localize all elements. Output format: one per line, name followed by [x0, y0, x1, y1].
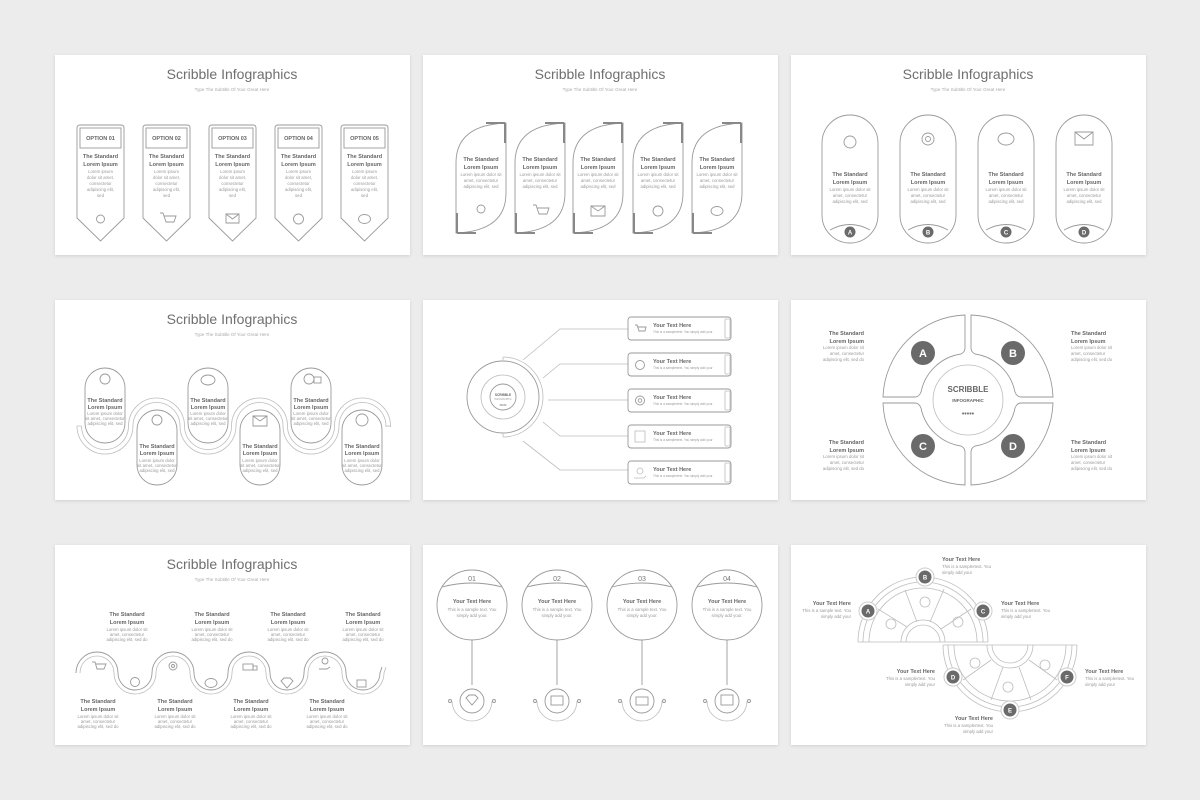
top semicircle [858, 568, 992, 642]
labels: This is a samplertext. You [942, 564, 992, 569]
top texts: amet, consectetur [110, 632, 145, 637]
side texts: amet, consectetur [830, 351, 865, 356]
bottom texts: The Standard [80, 699, 116, 705]
top texts: amet, consectetur [271, 632, 306, 637]
pills: Lorem Ipsum [911, 180, 945, 186]
top texts: The Standard [194, 612, 230, 618]
hub circle: INFOGRAPHIC [494, 398, 512, 401]
title: Scribble Infographics [167, 556, 297, 572]
labels: This is a samplertext. You [944, 723, 994, 728]
text boxes: Your Text Here [653, 323, 691, 329]
bottom texts: Lorem Ipsum [310, 707, 344, 713]
side texts: adipiscing elit, sed do [823, 466, 865, 471]
pills: The Standard [87, 398, 123, 404]
pills: The Standard [1066, 172, 1102, 178]
leaf cards [456, 123, 742, 233]
cards: sed [361, 193, 369, 198]
pills: D [1082, 230, 1087, 236]
cards: adipiscing elit, [153, 187, 180, 192]
cards: consectetur [155, 181, 178, 186]
bottom texts: Lorem ipsum dolor sit [306, 714, 348, 719]
circles: simply add your. [626, 613, 658, 618]
pills: The Standard [344, 444, 380, 450]
top texts: amet, consectetur [346, 632, 381, 637]
bottom texts: Lorem ipsum dolor sit [154, 714, 196, 719]
text boxes: This is a samplertext. You simply add your [653, 474, 713, 478]
pills: adipiscing elit, sed [832, 199, 868, 204]
wave line [76, 652, 386, 694]
cards: dolor sit amet, [351, 175, 378, 180]
subtitle: Type The Subtitle Of Your Great Here [195, 577, 270, 582]
cards: sed [229, 193, 237, 198]
pills: Lorem Ipsum [243, 451, 277, 457]
top texts: Lorem Ipsum [195, 620, 229, 626]
pills: The Standard [242, 444, 278, 450]
circles: Your Text Here [538, 599, 576, 605]
subtitle: Type The Subtitle Of Your Great Here [195, 332, 270, 337]
cards: consectetur [89, 181, 112, 186]
title: Scribble Infographics [535, 66, 665, 82]
cards [77, 125, 388, 241]
quadrant diagram: A [919, 348, 927, 360]
side texts: Lorem Ipsum [1071, 339, 1106, 345]
cards: Lorem Ipsum [83, 162, 118, 168]
top texts: Lorem ipsum dolor sit [191, 627, 233, 632]
pills: sit amet, consectetur [342, 463, 382, 468]
leaf cards: Lorem ipsum dolor sit [519, 172, 561, 177]
pills: Lorem ipsum dolor sit [985, 187, 1027, 192]
leaf cards: adipiscing elit, sed [699, 184, 735, 189]
side texts: Lorem ipsum dolor sit [1071, 454, 1113, 459]
cards: adipiscing elit, [285, 187, 312, 192]
pills: adipiscing elit, sed [344, 468, 380, 473]
labels: Your Text Here [955, 716, 993, 722]
labels: Your Text Here [942, 557, 980, 563]
cards: OPTION 01 [86, 136, 115, 142]
slide 5: hub with arrows [423, 300, 778, 500]
cards: OPTION 03 [218, 136, 247, 142]
labels: simply add your [942, 570, 973, 575]
cards: consectetur [221, 181, 244, 186]
title: Scribble Infographics [167, 66, 297, 82]
text boxes: Your Text Here [653, 431, 691, 437]
pills: C [1004, 230, 1009, 236]
slide 3: pill cards [791, 55, 1146, 255]
top texts: amet, consectetur [195, 632, 230, 637]
circles: simply add your. [541, 613, 573, 618]
pills: The Standard [190, 398, 226, 404]
cards: sed [295, 193, 303, 198]
circles: 03 [638, 576, 646, 583]
pills: Lorem Ipsum [345, 451, 379, 457]
top texts: adipiscing elit, sed do [267, 637, 309, 642]
circles: This is a sample text. You [533, 607, 582, 612]
pills: sit amet, consectetur [291, 416, 331, 421]
pills: Lorem ipsum dolor [139, 458, 175, 463]
pills: adipiscing elit, sed [139, 468, 175, 473]
circles: simply add your. [711, 613, 743, 618]
pills: The Standard [139, 444, 175, 450]
labels: Your Text Here [1085, 669, 1123, 675]
side texts [823, 331, 1113, 471]
top semicircle: C [981, 610, 986, 616]
bottom texts: amet, consectetur [81, 719, 116, 724]
leaf cards: The Standard [640, 157, 676, 163]
quadrant diagram [883, 315, 1053, 485]
bottom texts: The Standard [233, 699, 269, 705]
cards: Lorem ipsum [220, 169, 245, 174]
leaf cards: Lorem Ipsum [523, 165, 557, 171]
cards: Lorem ipsum [352, 169, 377, 174]
leaf cards: Lorem ipsum dolor sit [577, 172, 619, 177]
cards: adipiscing elit, [219, 187, 246, 192]
top texts: Lorem ipsum dolor sit [106, 627, 148, 632]
bottom texts: amet, consectetur [310, 719, 345, 724]
pills: The Standard [988, 172, 1024, 178]
leaf cards: The Standard [699, 157, 735, 163]
slide 9: double semicircle [791, 545, 1146, 745]
cards: The Standard [215, 154, 250, 160]
leaf cards: amet, consectetur [700, 178, 735, 183]
cards: Lorem Ipsum [149, 162, 184, 168]
pills: adipiscing elit, sed [87, 421, 123, 426]
cards: Lorem ipsum [286, 169, 311, 174]
top texts: Lorem ipsum dolor sit [342, 627, 384, 632]
labels: simply add your [821, 614, 852, 619]
quadrant diagram: C [919, 441, 927, 453]
bottom semicircle: E [1008, 708, 1012, 714]
top texts [106, 612, 384, 642]
top texts: The Standard [270, 612, 306, 618]
cards: The Standard [281, 154, 316, 160]
leaf cards: The Standard [463, 157, 499, 163]
text boxes: Your Text Here [653, 359, 691, 365]
cards: adipiscing elit, [87, 187, 114, 192]
wave track [77, 398, 390, 454]
pills [822, 115, 1112, 243]
leaf cards: The Standard [522, 157, 558, 163]
bottom texts: adipiscing elit, sed do [230, 724, 272, 729]
leaf cards: Lorem ipsum dolor sit [696, 172, 738, 177]
leaf cards: adipiscing elit, sed [522, 184, 558, 189]
bottom semicircle: F [1065, 676, 1069, 682]
bottom texts: Lorem ipsum dolor sit [230, 714, 272, 719]
side texts: amet, consectetur [830, 460, 865, 465]
cards: Lorem Ipsum [281, 162, 316, 168]
leaf cards: amet, consectetur [523, 178, 558, 183]
cards: OPTION 05 [350, 136, 379, 142]
cards: adipiscing elit, [351, 187, 378, 192]
slide 4: wave timeline [55, 300, 410, 500]
pills: Lorem ipsum dolor [190, 411, 226, 416]
bottom texts: adipiscing elit, sed do [77, 724, 119, 729]
cards: Lorem ipsum [154, 169, 179, 174]
top texts: Lorem Ipsum [271, 620, 305, 626]
bottom semicircle: D [951, 676, 956, 682]
quadrant diagram: B [1009, 348, 1017, 360]
slide 1: option cards [55, 55, 410, 255]
circles: Your Text Here [708, 599, 746, 605]
circles: 02 [553, 576, 561, 583]
text boxes: This is a samplertext. You simply add your [653, 438, 713, 442]
top texts: adipiscing elit, sed do [106, 637, 148, 642]
labels: Your Text Here [813, 601, 851, 607]
pills: adipiscing elit, sed [988, 199, 1024, 204]
side texts: Lorem Ipsum [829, 339, 864, 345]
labels: This is a samplertext. You [1085, 676, 1135, 681]
side texts: Lorem Ipsum [1071, 448, 1106, 454]
subtitle: Type The Subtitle Of Your Great Here [195, 87, 270, 92]
text boxes: This is a samplertext. You simply add your [653, 366, 713, 370]
side texts: The Standard [829, 440, 864, 446]
cards: consectetur [353, 181, 376, 186]
pills: Lorem ipsum dolor sit [907, 187, 949, 192]
cards: dolor sit amet, [219, 175, 246, 180]
pills: Lorem ipsum dolor [344, 458, 380, 463]
pills: Lorem ipsum dolor sit [1063, 187, 1105, 192]
pills: Lorem ipsum dolor sit [829, 187, 871, 192]
top texts: The Standard [109, 612, 145, 618]
cards: sed [97, 193, 105, 198]
labels: This is a samplertext. You [1001, 608, 1051, 613]
cards: dolor sit amet, [87, 175, 114, 180]
labels: simply add your [905, 682, 936, 687]
side texts: Lorem ipsum dolor sit [1071, 345, 1113, 350]
labels: simply add your [1001, 614, 1032, 619]
text boxes: This is a samplertext. You simply add your [653, 402, 713, 406]
pills: Lorem Ipsum [140, 451, 174, 457]
side texts: The Standard [1071, 440, 1106, 446]
side texts: amet, consectetur [1071, 351, 1106, 356]
pills: Lorem Ipsum [191, 405, 225, 411]
cards: dolor sit amet, [285, 175, 312, 180]
circles: This is a sample text. You [703, 607, 752, 612]
bottom texts: The Standard [309, 699, 345, 705]
quadrant diagram: SCRIBBLE [948, 385, 989, 394]
cards: consectetur [287, 181, 310, 186]
pills: sit amet, consectetur [85, 416, 125, 421]
bottom semicircle [943, 645, 1077, 719]
top semicircle: B [923, 576, 928, 582]
bottom texts: Lorem Ipsum [234, 707, 268, 713]
subtitle: Type The Subtitle Of Your Great Here [563, 87, 638, 92]
side texts: Lorem Ipsum [829, 448, 864, 454]
quadrant diagram: INFOGRAPHIC [952, 398, 985, 403]
circles: This is a sample text. You [448, 607, 497, 612]
leaf cards: The Standard [580, 157, 616, 163]
bottom texts: Lorem ipsum dolor sit [77, 714, 119, 719]
text boxes: Your Text Here [653, 467, 691, 473]
top texts: adipiscing elit, sed do [191, 637, 233, 642]
leaf cards: adipiscing elit, sed [580, 184, 616, 189]
circles: 04 [723, 576, 731, 583]
side texts: Lorem ipsum dolor sit [823, 345, 865, 350]
circles: Your Text Here [453, 599, 491, 605]
bottom texts: Lorem Ipsum [158, 707, 192, 713]
top texts: The Standard [345, 612, 381, 618]
pills [85, 368, 382, 485]
side texts: The Standard [1071, 331, 1106, 337]
quadrant diagram: ••••• [962, 411, 975, 418]
slide 8: numbered circles [423, 545, 778, 745]
pills: The Standard [293, 398, 329, 404]
pills: amet, consectetur [989, 193, 1024, 198]
slide 7: wavy line timeline [55, 545, 410, 745]
subtitle: Type The Subtitle Of Your Great Here [931, 87, 1006, 92]
labels: This is a samplertext. You [886, 676, 936, 681]
pills: adipiscing elit, sed [190, 421, 226, 426]
top texts: Lorem Ipsum [110, 620, 144, 626]
pills: Lorem ipsum dolor [87, 411, 123, 416]
cards: The Standard [347, 154, 382, 160]
leaf cards: Lorem Ipsum [641, 165, 675, 171]
leaf cards: Lorem Ipsum [464, 165, 498, 171]
pills: adipiscing elit, sed [242, 468, 278, 473]
hub circle [467, 357, 543, 437]
bottom texts: adipiscing elit, sed do [154, 724, 196, 729]
top semicircle: A [866, 610, 871, 616]
bottom texts: The Standard [157, 699, 193, 705]
slide 2: leaf cards [423, 55, 778, 255]
pills: A [848, 230, 853, 236]
title: Scribble Infographics [167, 311, 297, 327]
cards: sed [163, 193, 171, 198]
arrows [523, 329, 628, 470]
cards: Lorem ipsum [88, 169, 113, 174]
icons [92, 658, 366, 688]
pills: Lorem Ipsum [833, 180, 867, 186]
leaf cards: Lorem Ipsum [700, 165, 734, 171]
pills: Lorem Ipsum [1067, 180, 1101, 186]
leaf cards: Lorem ipsum dolor sit [637, 172, 679, 177]
pills: Lorem ipsum dolor [293, 411, 329, 416]
text boxes: This is a samplertext. You simply add your [653, 330, 713, 334]
pills: Lorem Ipsum [989, 180, 1023, 186]
leaf cards: Lorem Ipsum [581, 165, 615, 171]
pills: Lorem Ipsum [294, 405, 328, 411]
circles [437, 570, 762, 721]
title: Scribble Infographics [903, 66, 1033, 82]
pills: amet, consectetur [911, 193, 946, 198]
slide 6: quadrant circle [791, 300, 1146, 500]
pills: amet, consectetur [833, 193, 868, 198]
pills: B [926, 230, 931, 236]
leaf cards: amet, consectetur [641, 178, 676, 183]
bottom texts: Lorem Ipsum [81, 707, 115, 713]
pills: sit amet, consectetur [240, 463, 280, 468]
hub circle: SCRIBBLE [495, 393, 511, 397]
labels: simply add your [963, 729, 994, 734]
top texts: Lorem Ipsum [346, 620, 380, 626]
side texts: amet, consectetur [1071, 460, 1106, 465]
leaf cards: adipiscing elit, sed [640, 184, 676, 189]
circles: This is a sample text. You [618, 607, 667, 612]
labels: Your Text Here [1001, 601, 1039, 607]
leaf cards: adipiscing elit, sed [463, 184, 499, 189]
bottom texts: amet, consectetur [234, 719, 269, 724]
bottom texts: amet, consectetur [158, 719, 193, 724]
side texts: adipiscing elit, sed do [823, 357, 865, 362]
circles: 01 [468, 576, 476, 583]
pills: Lorem ipsum dolor [242, 458, 278, 463]
top texts: Lorem ipsum dolor sit [267, 627, 309, 632]
side texts: The Standard [829, 331, 864, 337]
pills: The Standard [832, 172, 868, 178]
text boxes [628, 317, 731, 484]
cards: OPTION 02 [152, 136, 181, 142]
circles: simply add your. [456, 613, 488, 618]
labels [802, 557, 1135, 734]
cards: dolor sit amet, [153, 175, 180, 180]
side texts: Lorem ipsum dolor sit [823, 454, 865, 459]
cards: OPTION 04 [284, 136, 314, 142]
labels: This is a sample text. You [802, 608, 852, 613]
hub circle: ••••• [499, 402, 507, 407]
cards: Lorem Ipsum [215, 162, 250, 168]
cards: The Standard [83, 154, 118, 160]
pills: amet, consectetur [1067, 193, 1102, 198]
leaf cards: amet, consectetur [464, 178, 499, 183]
quadrant diagram: D [1009, 441, 1017, 453]
circles: Your Text Here [623, 599, 661, 605]
labels: Your Text Here [897, 669, 935, 675]
side texts: adipiscing elit, sed do [1071, 466, 1113, 471]
pills: sit amet, consectetur [188, 416, 228, 421]
pills: Lorem Ipsum [88, 405, 122, 411]
cards: The Standard [149, 154, 184, 160]
pills: adipiscing elit, sed [1066, 199, 1102, 204]
leaf cards: Lorem ipsum dolor sit [460, 172, 502, 177]
cards: Lorem Ipsum [347, 162, 382, 168]
pills: adipiscing elit, sed [910, 199, 946, 204]
pills: sit amet, consectetur [137, 463, 177, 468]
bottom texts: adipiscing elit, sed do [306, 724, 348, 729]
pills: adipiscing elit, sed [293, 421, 329, 426]
top texts: adipiscing elit, sed do [342, 637, 384, 642]
side texts: adipiscing elit, sed do [1071, 357, 1113, 362]
bottom texts [77, 699, 348, 729]
leaf cards: amet, consectetur [581, 178, 616, 183]
text boxes: Your Text Here [653, 395, 691, 401]
pills: The Standard [910, 172, 946, 178]
labels: simply add your [1085, 682, 1116, 687]
